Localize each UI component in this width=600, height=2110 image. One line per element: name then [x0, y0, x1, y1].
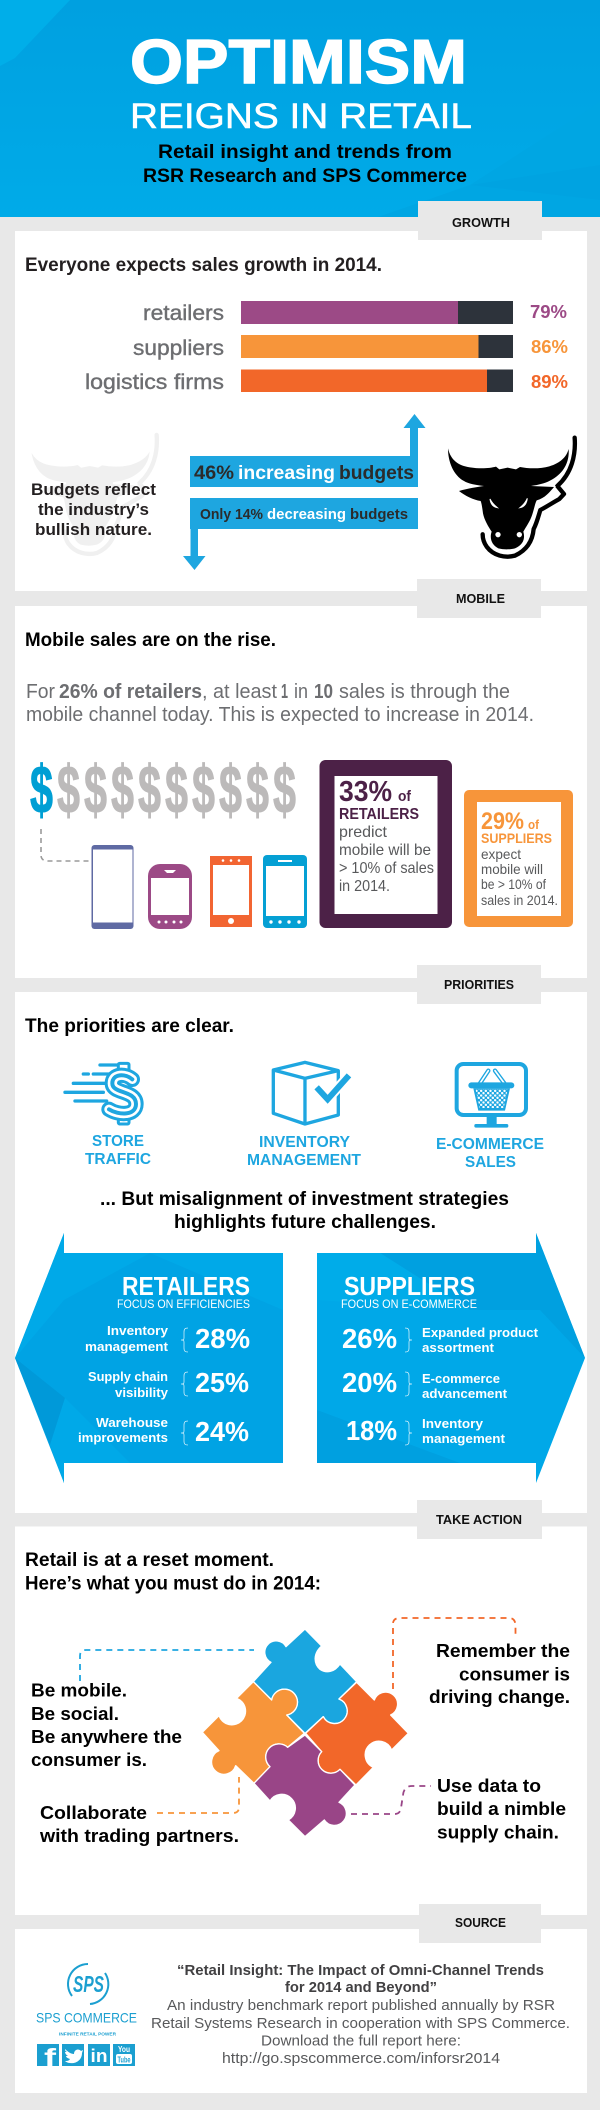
arrow: 46% increasing budgets: budgets [339, 463, 414, 484]
callout: 33% of retailers tablet: predict [339, 824, 388, 841]
label: e-commerce sales: E-COMMERCE [436, 1136, 544, 1153]
stat: warehouse improvements 24%: Warehouse [96, 1415, 168, 1430]
arrow: 14% decreasing budgets: budgets [350, 506, 408, 523]
icon row: ten dollar signs, one highlighted: $ [219, 752, 242, 828]
label: e-commerce sales [436, 1136, 544, 1171]
heading: misalignment [100, 1188, 509, 1233]
icon: store traffic dollar [65, 1063, 136, 1124]
panel: growth [15, 201, 587, 591]
puzzle piece: red [306, 1682, 408, 1785]
icon row: ten dollar signs, one highlighted: $ [192, 752, 215, 828]
callout: 29% of suppliers tablet: expect [481, 846, 521, 862]
callout: 29% of suppliers tablet: of [528, 817, 540, 832]
text: remember the consumer: consumer is [459, 1664, 570, 1684]
icon: phone orange [210, 856, 252, 927]
arrow: 14% decreasing budgets: decreasing [267, 506, 346, 523]
stat: supply chain visibility 25%: visibility [115, 1385, 169, 1400]
bar: suppliers [133, 335, 568, 360]
puzzle: four interlocking pieces [202, 1629, 408, 1837]
bar: suppliers: 86% [531, 337, 568, 357]
callout: 33% of retailers tablet: of [398, 788, 412, 805]
tab: take action: TAKE ACTION [436, 1512, 522, 1527]
text: collaborate: Collaborate [40, 1803, 147, 1823]
label: inventory management: MANAGEMENT [247, 1152, 361, 1169]
heading: suppliers: SUPPLIERS [344, 1271, 475, 1301]
puzzle piece: purple [254, 1735, 355, 1837]
text: source citation: for 2014 and Beyond” [285, 1979, 437, 1996]
bar: logistics firms [85, 370, 568, 394]
subtitle: Retail insight and trends from [158, 141, 452, 163]
text: mobile channel paragraph: sales is through the [339, 681, 510, 703]
puzzle piece: blue [253, 1629, 357, 1733]
icon: facebook: f [44, 2044, 57, 2072]
text: source citation: An industry benchmark report published annually by RSR [167, 1997, 555, 2014]
logo: SPS Commerce: SPS [73, 1971, 104, 1997]
tab: mobile [417, 579, 541, 618]
icon row: ten dollar signs, one highlighted: $ [84, 752, 107, 828]
text: use data: supply chain. [437, 1822, 559, 1842]
label: store traffic [85, 1133, 151, 1168]
arrow: 46% increasing budgets [190, 414, 426, 487]
stat: e-commerce advancement 20%: 20% [342, 1367, 397, 1398]
text: be mobile [31, 1680, 182, 1770]
text: be mobile: Be social. [31, 1704, 119, 1724]
icon row: ten dollar signs, one highlighted: $ [246, 752, 269, 828]
text: be mobile: Be anywhere the [31, 1727, 182, 1747]
stat: supply chain visibility 25%: 25% [195, 1367, 249, 1398]
connector: purple dashed [351, 1786, 431, 1814]
text: budgets reflect bullish nature: the industry’s [38, 501, 149, 519]
heading: misalignment: highlights future challenges. [174, 1211, 436, 1233]
stat: inventory management 28%: Inventory [107, 1323, 169, 1338]
icon: facebook [37, 2044, 59, 2072]
text: be mobile: Be mobile. [31, 1680, 127, 1700]
text: use data: Use data to [437, 1776, 541, 1796]
text: use data: build a nimble [437, 1799, 566, 1819]
icon row: ten dollar signs, one highlighted [30, 752, 296, 828]
stat: inventory management 18%: Inventory [422, 1416, 484, 1431]
heading: retailers: FOCUS ON EFFICIENCIES [117, 1297, 250, 1311]
tab: take action [417, 1500, 542, 1539]
icon row: ten dollar signs, one highlighted: $ [111, 752, 134, 828]
text: remember the consumer [429, 1641, 570, 1707]
callout: 29% of suppliers tablet [464, 790, 573, 927]
text: mobile channel paragraph: 10 [314, 681, 333, 703]
callout: 29% of suppliers tablet: sales in 2014. [481, 892, 558, 908]
stat: e-commerce advancement 20% [342, 1367, 508, 1401]
bar: logistics firms: 89% [531, 372, 568, 392]
arrow: 14% decreasing budgets: Only 14% [200, 506, 263, 523]
text: remember the consumer: Remember the [436, 1641, 570, 1661]
icon: inventory box with check [273, 1062, 349, 1124]
heading: mobile sales: Mobile sales are on the rise. [25, 629, 276, 651]
icon row: ten dollar signs, one highlighted: $ [57, 752, 80, 828]
callout: 29% of suppliers tablet: SUPPLIERS [481, 830, 552, 846]
icon: twitter [62, 2044, 84, 2066]
icon: phone purple-blue [92, 845, 134, 929]
panel: suppliers arrow [317, 1233, 585, 1483]
logo: SPS Commerce [36, 1964, 137, 2036]
arrow: 46% increasing budgets: increasing [238, 463, 335, 484]
stat: e-commerce advancement 20%: advancement [422, 1386, 508, 1401]
panel: retailers arrow [15, 1233, 283, 1483]
tab: priorities [417, 965, 541, 1004]
icon: phone blue [263, 855, 307, 928]
text: mobile channel paragraph [26, 681, 534, 726]
stat: warehouse improvements 24% [78, 1415, 249, 1447]
panel: priorities [15, 965, 587, 1513]
text: source citation: “Retail Insight: The Impact of Omni-Channel Trends [177, 1962, 544, 1979]
icon: youtube: You [118, 2044, 130, 2054]
tab: growth: GROWTH [452, 215, 510, 230]
connector: orange dashed bottom [157, 1777, 239, 1813]
bar: logistics firms: logistics firms [85, 371, 224, 394]
text: source citation: http://go.spscommerce.com/inforsr2014 [222, 2050, 500, 2067]
callout: 33% of retailers tablet: RETAILERS [339, 806, 419, 823]
stat: inventory management 18%: management [422, 1431, 506, 1446]
tab: priorities: PRIORITIES [444, 977, 514, 992]
panel: mobile [15, 579, 587, 978]
text: collaborate: with trading partners. [39, 1826, 239, 1846]
stat: expanded product assortment 26%: Expanded product [422, 1325, 539, 1340]
stat: inventory management 28% [85, 1323, 250, 1354]
bar: retailers [143, 301, 567, 325]
icon: youtube [113, 2044, 135, 2066]
header banner [0, 0, 600, 217]
subtitle: RSR Research and SPS Commerce [143, 165, 467, 187]
stat: inventory management 28%: management [85, 1339, 169, 1354]
connector: blue dashed [80, 1650, 254, 1681]
logo: SPS Commerce: SPS COMMERCE [36, 2010, 137, 2026]
title: reigns in retail: REIGNS IN RETAIL [130, 97, 472, 136]
heading: retailers: RETAILERS [122, 1271, 250, 1301]
text: budgets reflect bullish nature: bullish nature. [35, 521, 152, 539]
stat: warehouse improvements 24%: improvements [78, 1430, 168, 1445]
puzzle piece: orange [202, 1682, 304, 1783]
text: be mobile: consumer is. [31, 1750, 147, 1770]
text: use data [437, 1776, 566, 1842]
callout: 29% of suppliers tablet: be > 10% of [481, 876, 546, 892]
heading: misalignment: ... But misalignment of investment strategies [100, 1188, 509, 1210]
text: mobile channel paragraph: For [26, 681, 55, 703]
callout: 33% of retailers tablet: mobile will be [339, 842, 431, 859]
panel: source [15, 1904, 587, 2093]
title: optimism: OPTIMISM [130, 28, 467, 97]
logo: SPS Commerce: INFINITE RETAIL POWER [59, 2032, 117, 2036]
text: remember the consumer: driving change. [429, 1687, 570, 1707]
connector: dollar to phone [41, 829, 90, 861]
heading: reset moment [25, 1549, 321, 1594]
icon row: ten dollar signs, one highlighted: $ [273, 752, 296, 828]
stat: inventory management 18%: 18% [346, 1415, 397, 1446]
heading: priorities: The priorities are clear. [25, 1015, 234, 1037]
heading: reset moment: Here’s what you must do in 2014: [25, 1572, 321, 1594]
label: inventory management: INVENTORY [259, 1134, 350, 1151]
callout: 29% of suppliers tablet: mobile will [481, 861, 543, 877]
icon: phone magenta [148, 864, 192, 929]
stat: expanded product assortment 26%: 26% [342, 1323, 397, 1354]
text: source citation [151, 1962, 570, 2067]
label: inventory management [247, 1134, 361, 1169]
bar: suppliers: suppliers [133, 337, 224, 360]
text: mobile channel paragraph: 26% of retailers [59, 681, 202, 703]
heading: sales growth: Everyone expects sales growth in 2014. [25, 254, 382, 276]
callout: 33% of retailers tablet: 33% [339, 776, 392, 808]
bar chart: sales growth expectation [85, 301, 568, 394]
arrow: 14% decreasing budgets [183, 498, 418, 570]
text: budgets reflect bullish nature: Budgets reflect [31, 481, 157, 499]
callout: 33% of retailers tablet: in 2014. [339, 878, 390, 895]
stat: warehouse improvements 24%: 24% [195, 1416, 249, 1447]
icon row: ten dollar signs, one highlighted: $ [138, 752, 161, 828]
text: mobile channel paragraph: 1 [281, 681, 288, 703]
stat: supply chain visibility 25%: Supply chain [88, 1369, 168, 1384]
text: mobile channel paragraph: in [294, 681, 308, 703]
text: source citation: Download the full report here: [261, 2032, 461, 2050]
subtitle [143, 141, 467, 187]
panel: take action [15, 1500, 587, 1915]
bar: retailers: 79% [530, 302, 567, 322]
text: mobile channel paragraph: , at least [202, 681, 277, 703]
icon: black bull [448, 438, 575, 557]
stat: inventory management 18% [346, 1415, 506, 1446]
heading: suppliers [341, 1271, 477, 1311]
text: source citation: Retail Systems Research in cooperation with SPS Commerce. [151, 2015, 570, 2032]
label: store traffic: STORE [92, 1133, 144, 1150]
connector: orange dashed top [393, 1618, 516, 1689]
stat: inventory management 28%: 28% [195, 1323, 250, 1354]
stat: e-commerce advancement 20%: E-commerce [422, 1371, 500, 1386]
tab: growth [418, 201, 542, 240]
icon: linkedin [88, 2044, 110, 2066]
icon: youtube: Tube [118, 2054, 131, 2064]
callout: 33% of retailers tablet [320, 760, 452, 928]
heading: retailers [117, 1271, 250, 1311]
heading: suppliers: FOCUS ON E-COMMERCE [341, 1297, 477, 1311]
icon: linkedin: in [90, 2046, 108, 2066]
icon row: ten dollar signs, one highlighted: $ [30, 752, 53, 828]
icon row: ten dollar signs, one highlighted: $ [165, 752, 188, 828]
text: budgets reflect bullish nature [31, 481, 157, 539]
callout: 29% of suppliers tablet: 29% [481, 808, 524, 835]
stat: expanded product assortment 26% [342, 1323, 539, 1355]
arrow: 46% increasing budgets: 46% [194, 463, 234, 484]
label: e-commerce sales: SALES [465, 1154, 516, 1171]
icon: monitor with basket [457, 1064, 526, 1128]
callout: 33% of retailers tablet: > 10% of sales [339, 860, 434, 877]
tab: mobile: MOBILE [456, 591, 505, 606]
tab: source: SOURCE [455, 1915, 506, 1930]
heading: reset moment: Retail is at a reset moment. [25, 1549, 274, 1571]
text: mobile channel paragraph: mobile channel today. This is expected to increase in 2014. [26, 704, 534, 726]
stat: supply chain visibility 25% [88, 1367, 249, 1400]
bar: retailers: retailers [143, 302, 224, 325]
stat: expanded product assortment 26%: assortment [422, 1340, 495, 1355]
label: store traffic: TRAFFIC [85, 1151, 151, 1168]
text: collaborate [39, 1803, 239, 1846]
tab: source [419, 1904, 541, 1943]
icon: faded bull watermark [30, 435, 157, 554]
